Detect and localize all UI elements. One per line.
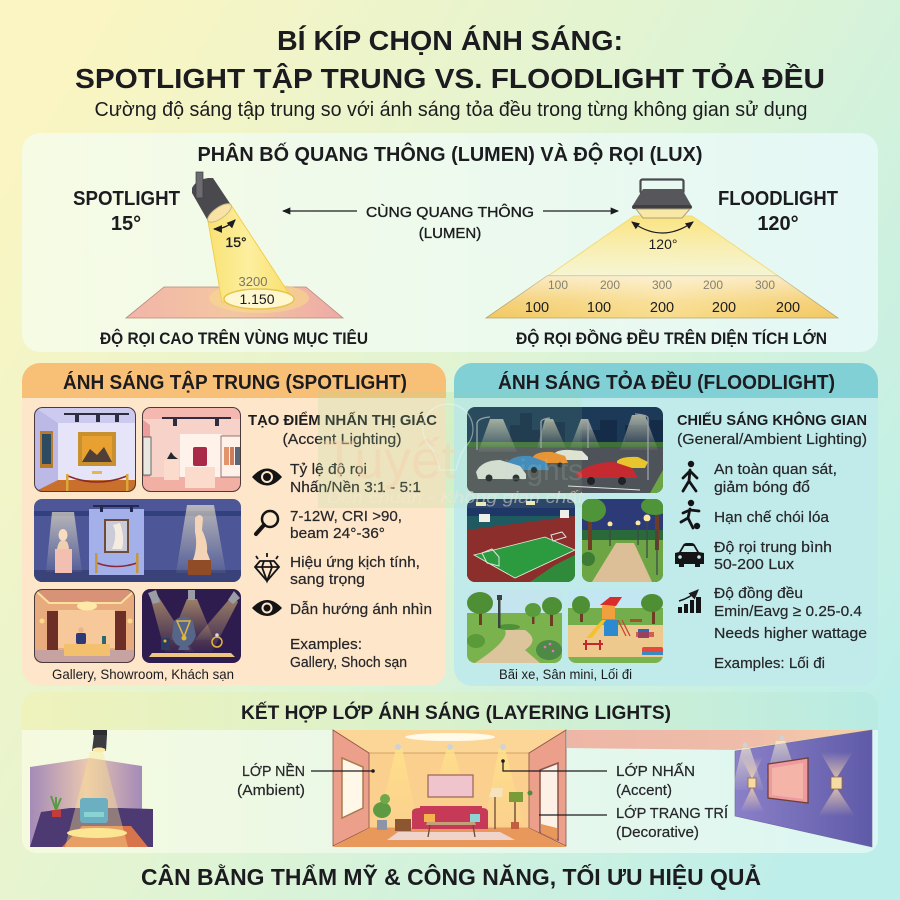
label: same lumen [366,204,534,242]
image: gallery painting [34,407,136,492]
image: sculpture gallery [34,499,241,582]
label: ambient layer: (Ambient) [237,782,305,799]
watermark: Đèn chuẩn - Không gian chất [327,488,584,507]
panel: spotlight [22,363,446,686]
icon: rising bar chart [678,590,701,613]
label: decorative layer [539,805,729,841]
text: floodlight examples: Examples: Lối đi [714,655,825,672]
spotlight floor [126,287,343,318]
caption: uniform illuminance: ĐỘ RỌI ĐỒNG ĐỀU TRÊN DIỆN TÍCH LỚN [516,329,827,348]
heading: floodlight: ÁNH SÁNG TỎA ĐỀU (FLOODLIGHT) [498,370,835,394]
floodlight lux values top row: 300 [652,278,672,292]
floodlight beam [548,216,778,276]
image: playground [568,589,663,663]
floodlight lux values top row [548,278,775,292]
image: hotel lobby [34,589,135,663]
text: safety: An toàn quan sát, [714,461,837,478]
text: accent lighting heading [248,411,437,448]
watermark: Tuyết [323,430,456,490]
label: spotlight 15 degrees: SPOTLIGHT [73,188,180,210]
heading: distribution: PHÂN BỐ QUANG THÔNG (LUMEN) VÀ ĐỘ RỌI (LUX) [198,142,702,166]
text: uniformity: Emin/Eavg ≥ 0.25-0.4 [714,603,862,620]
text: guide the eye: Dẫn hướng ánh nhìn [290,601,432,618]
label: decorative layer: (Decorative) [616,824,699,841]
spotlight lux values [239,274,275,307]
label: spotlight 15 degrees: 15° [111,213,141,235]
label: same lumen: (LUMEN) [419,225,481,242]
caption: spotlight images: Gallery, Showroom, Khách sạn [52,666,234,682]
text: spotlight examples: Examples: [290,636,362,653]
text: uniformity: Độ đồng đều [714,585,803,602]
panel: lumen and lux distribution [22,133,878,352]
header: floodlight [454,363,878,398]
text: safety [714,461,837,496]
text: specifications: 7-12W, CRI >90, [290,508,402,525]
heading: spotlight: ÁNH SÁNG TẬP TRUNG (SPOTLIGHT) [63,370,407,394]
image: showroom [142,407,241,492]
floodlight lux values top row: 200 [703,278,723,292]
spotlight light pool [209,283,309,313]
floodlight lux values bottom row: 200 [712,300,736,316]
label: accent layer: LỚP NHẤN [616,763,695,780]
illustration: single spotlight room [30,730,153,847]
label: accent layer [501,759,695,799]
footer statement: CÂN BẰNG THẨM MỸ & CÔNG NĂNG, TỐI ƯU HIỆU QUẢ [141,862,761,890]
label: spotlight 15 degrees [73,188,180,235]
floodlight lux values bottom row: 100 [587,300,611,316]
label: floodlight 120 degrees [718,188,838,235]
watermark [318,392,584,508]
image: park [467,589,562,663]
arrow: left [283,210,357,212]
caption: high illuminance on target: ĐỘ RỌI CAO TRÊN VÙNG MỤC TIÊU [100,329,368,348]
text: average illuminance: 50-200 Lux [714,556,795,573]
icon: car [675,543,704,567]
spotlight hot spot [224,289,294,309]
floodlight lux values bottom row: 100 [525,300,549,316]
illustration: living room [333,730,566,847]
text: safety: giảm bóng đổ [714,479,810,496]
text: accent lighting heading: TẠO ĐIỂM NHẤN THỊ GIÁC [248,411,437,429]
header: layering lights [22,692,878,730]
text: dramatic effect: Hiệu ứng kịch tính, [290,554,420,571]
text: average illuminance [714,539,832,573]
arrow: right [543,210,618,212]
header: spotlight [22,363,446,398]
text: spotlight examples: Gallery, Shoch sạn [290,654,407,671]
label: floodlight 120 degrees: FLOODLIGHT [718,188,838,210]
icon: eye [252,600,282,616]
label: ambient layer [237,763,375,799]
panel: layering lights [22,692,878,853]
panel: floodlight [454,363,878,686]
text: ambient lighting heading: (General/Ambient Lighting) [677,431,867,448]
floodlight lux values bottom row: 200 [776,300,800,316]
text: ambient lighting heading: CHIẾU SÁNG KHÔNG GIAN [677,411,867,429]
text: glare: Hạn chế chói lóa [714,509,830,526]
icon: eye [252,468,282,486]
image: car park at night [467,407,663,493]
text: uniformity [714,585,867,642]
floodlight angle value: 120° [649,236,677,252]
floodlight lux values top row: 300 [755,278,775,292]
floodlight lux values top row: 200 [600,278,620,292]
label: accent layer: (Accent) [616,782,672,799]
icon: walking person [683,461,697,491]
text: illuminance ratio: Tỷ lệ độ rọi [290,461,367,478]
label: same lumen: CÙNG QUANG THÔNG [366,204,534,221]
icon: spotlight fixture [192,172,234,226]
spotlight angle arc [214,220,235,229]
image: jewellery display [142,589,241,663]
text: illuminance ratio [290,461,421,496]
text: average illuminance: Độ rọi trung bình [714,539,832,556]
spotlight lux values: 3200 [239,274,267,289]
label: ambient layer: LỚP NỀN [242,763,305,780]
floodlight lux values top row: 100 [548,278,568,292]
spotlight beam [208,205,290,302]
icon: floodlight fixture [632,180,692,218]
floodlight floor [486,276,838,318]
subtitle: Cường độ sáng tập trung so với ánh sáng tỏa đều trong từng không gian sử dụng [94,99,808,121]
label: decorative layer: LỚP TRANG TRÍ [616,805,729,822]
text: dramatic effect [290,554,420,588]
label: floodlight 120 degrees: 120° [757,213,799,235]
floodlight lux values bottom row: 200 [650,300,674,316]
spotlight angle value: 15° [225,234,247,250]
spotlight lux values: 1.150 [239,291,275,307]
text: accent lighting heading: (Accent Lighting) [282,431,402,448]
floodlight angle arc [632,222,693,233]
illustration: accent wall [567,730,872,847]
icon: diamond [255,553,279,581]
title [75,25,825,94]
icon: magnifier [256,511,278,534]
image: mini football pitch [467,499,575,582]
icon: football player [681,500,700,529]
floodlight lux values bottom row [525,300,800,316]
caption: floodlight images: Bãi xe, Sân mini, Lối đi [499,666,632,682]
title: BÍ KÍP CHỌN ÁNH SÁNG: [277,25,623,56]
title: SPOTLIGHT TẬP TRUNG VS. FLOODLIGHT TỎA ĐỀU [75,62,825,94]
text: spotlight examples [290,636,407,671]
text: dramatic effect: sang trọng [290,571,365,588]
image: park path at night [582,499,663,582]
text: illuminance ratio: Nhấn/Nền 3:1 - 5:1 [290,479,421,496]
text: ambient lighting heading [677,411,867,448]
watermark: Lights [503,454,583,487]
text: uniformity: Needs higher wattage [714,625,867,642]
text: specifications: beam 24°-36° [290,525,385,542]
text: specifications [290,508,402,542]
heading: layering lights: KẾT HỢP LỚP ÁNH SÁNG (LAYERING LIGHTS) [241,702,671,724]
